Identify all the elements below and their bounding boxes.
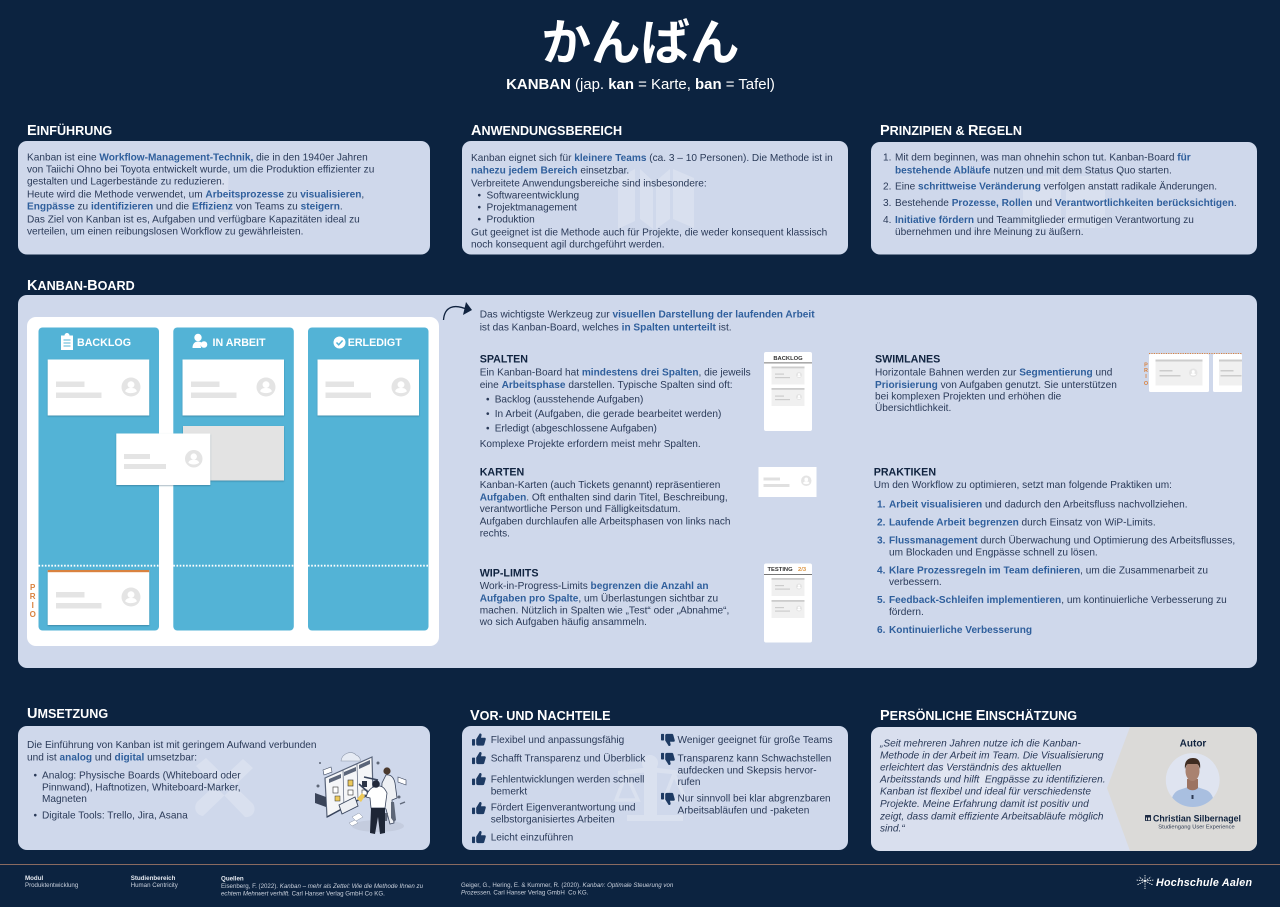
mini swimlane: R (1144, 368, 1148, 374)
quote text: Methode in der Arbeit im Team. Die Visualisierung (880, 750, 1104, 761)
arrow (444, 302, 472, 320)
section: WIP-Limits: wo sich Aufgaben häufig ansammeln. (479, 617, 647, 628)
section: Praktiken: um Blockaden und Engpässe schnell zu lösen. (889, 548, 1098, 559)
section: Swimlanes: Horizontale Bahnen werden zur Segmentierung und (875, 368, 1112, 379)
list: disadvantages: Weniger geeignet für große Teams (678, 735, 833, 746)
section: Spalten (480, 354, 751, 450)
subtitle: KANBAN (jap. kan = Karte, ban = Tafel) (506, 76, 775, 93)
text: Umsetzung: und ist analog und digital umsetzbar: (27, 752, 197, 763)
footer: Quellen: echtem Mehrwert verhilft. Carl Hanser Verlag GmbH Co KG. (221, 890, 385, 898)
list: advantages: Leicht einzuführen (491, 833, 573, 844)
swimlane divider (38, 565, 428, 567)
label: PRIO: O (30, 610, 36, 619)
section: Karten: KARTEN (480, 466, 524, 478)
icon: user with clock (192, 334, 207, 348)
heading: Einführung: EINFÜHRUNG (27, 123, 112, 139)
label: PRIO: R (30, 592, 36, 601)
text: Anwendungsbereich: Verbreitete Anwendungsbereiche sind insbesondere: (471, 178, 707, 189)
text: Einführung: verteilen, um einen reibungslosen Workflow zu gewährleisten. (27, 226, 303, 237)
text: Anwendungsbereich: noch konsequent agil durchgeführt werden. (471, 240, 665, 251)
card (318, 360, 419, 416)
text: Anwendungsbereich: • (478, 203, 482, 214)
text: Anwendungsbereich: Projektmanagement (486, 203, 577, 214)
text: Prinzipien: 3. (883, 198, 891, 209)
section: Spalten: • (486, 409, 490, 420)
text: Prinzipien: bestehende Abläufe nutzen und mit dem Status Quo starten. (895, 165, 1172, 176)
section: WIP-Limits: machen. Nützlich in Spalten wie „Test“ oder „Abnahme“, (480, 606, 729, 617)
author: Christian Silbernagel (1153, 814, 1241, 824)
list: disadvantages: Arbeitsabläufen und -paketen (678, 806, 809, 817)
title: かんばん (542, 16, 740, 71)
section: Praktiken (874, 466, 1235, 636)
list: advantages: Fördert Eigenverantwortung und (491, 803, 635, 814)
section: Praktiken: Feedback-Schleifen implementieren, um kontinuierliche Verbesserung zu (889, 595, 1227, 606)
watermark: exclamation mark (218, 172, 229, 223)
label: PRIO (30, 583, 36, 619)
list: advantages: selbstorganisiertes Arbeiten (491, 815, 615, 826)
text: Einführung (27, 152, 374, 237)
section: Praktiken: PRAKTIKEN (874, 466, 936, 478)
quote text: Kanban ist flexibel und ideal für verschiedenste (880, 787, 1091, 798)
mini column: Backlog: BACKLOG (773, 356, 803, 362)
text: Einführung: Kanban ist eine Workflow-Management-Technik, die in den 1940er Jahren (27, 152, 368, 163)
text: intro to board (480, 310, 815, 333)
mini column: Testing (764, 564, 812, 642)
section: Spalten: Komplexe Projekte erfordern meist mehr Spalten. (480, 439, 701, 450)
section: WIP-Limits: WIP-LIMITS (480, 568, 538, 580)
quote text: Arbeitsstands und hilft Engpässe zu identifizieren. (879, 775, 1106, 786)
section: Praktiken: 4. (877, 566, 886, 577)
text: Anwendungsbereich: Gut geeignet ist die Methode auch für Projekte, die weder konsequent klassisch (471, 228, 827, 239)
text: Prinzipien: 4. (883, 215, 891, 226)
text: Umsetzung: Magneten (42, 794, 87, 805)
text: Anwendungsbereich: nahezu jedem Bereich einsetzbar. (471, 165, 629, 176)
mini swimlane (1144, 354, 1242, 392)
watermark: scales (616, 755, 686, 821)
section: Swimlanes: SWIMLANES (875, 354, 940, 366)
text: Umsetzung: Analog: Physische Boards (Whiteboard oder (42, 771, 241, 782)
section: WIP-Limits: Aufgaben pro Spalte, um Überlastungen sichtbar zu (480, 593, 718, 605)
text: Einführung: gestalten und Lagerbestände zu reduzieren. (27, 176, 225, 187)
footer: Quellen (221, 876, 424, 898)
panel: Umsetzung (18, 726, 430, 850)
section: Praktiken: fördern. (889, 607, 924, 618)
section: Spalten: Erledigt (abgeschlossene Aufgaben) (495, 423, 657, 434)
priority card (48, 570, 149, 625)
card (48, 360, 149, 416)
section: WIP-Limits (479, 568, 729, 628)
mini swimlane: I (1145, 374, 1147, 380)
section: Karten: Aufgaben. Oft enthalten sind darin Titel, Beschreibung, (480, 492, 728, 503)
column: Erledigt (308, 328, 428, 630)
section: Swimlanes: bei komplexen Projekten und erhöhen die (875, 392, 1062, 403)
text: Prinzipien: 1. (883, 153, 891, 164)
footer: Quellen 2 (461, 882, 674, 896)
heading: Kanban-Board: KANBAN-BOARD (27, 278, 135, 294)
section: Spalten: • (486, 423, 490, 434)
list: disadvantages: rufen (678, 777, 701, 788)
heading: Prinzipien und Regeln: PRINZIPIEN & REGELN (880, 123, 1022, 139)
section: Praktiken: 2. (877, 518, 886, 529)
text: Prinzipien: Bestehende Prozesse, Rollen und Verantwortlichkeiten berücksichtigen. (895, 198, 1237, 209)
section: Praktiken: Kontinuierliche Verbesserung (889, 625, 1032, 636)
section: Karten: Kanban-Karten (auch Tickets genannt) repräsentieren (480, 480, 720, 491)
icon: check circle (334, 336, 346, 348)
mini column: Testing: TESTING (768, 567, 793, 573)
text: Einführung: Engpässe zu identifizieren und die Effizienz von Teams zu steigern. (27, 202, 343, 213)
mini column: Testing: 2/3 (798, 567, 807, 573)
footer: Modul: Produktentwicklung (25, 882, 79, 889)
author: Autor (1180, 738, 1206, 750)
dragged card (116, 434, 210, 485)
list: disadvantages: aufdecken und Skepsis hervor- (678, 766, 817, 777)
text: Umsetzung (27, 740, 317, 822)
author: Studiengang User Experience (1158, 824, 1235, 830)
small items (316, 762, 400, 798)
footer: Modul (25, 875, 79, 889)
panel: Anwendungsbereich (462, 141, 848, 254)
quote text: sind.“ (880, 824, 905, 835)
mini swimlane: O (1144, 381, 1149, 387)
logo: Hochschule Aalen: Hochschule Aalen (1156, 877, 1252, 889)
text: Umsetzung: • (34, 771, 38, 782)
footer: Studienbereich: Studienbereich (131, 875, 176, 882)
list: advantages: Schafft Transparenz und Überblick (491, 753, 646, 765)
list: disadvantages: Transparenz kann Schwachstellen (678, 754, 831, 765)
list: disadvantages (661, 734, 833, 817)
section: Praktiken: Flussmanagement durch Überwachung und Optimierung des Arbeitsflusses, (889, 535, 1235, 547)
text: Anwendungsbereich: Kanban eignet sich für kleinere Teams (ca. 3 – 10 Personen). Die Methode ist in (471, 153, 833, 164)
section: Karten: verantwortliche Person und Fälligkeitsdatum. (480, 504, 681, 515)
section: Swimlanes: Übersichtlichkeit. (875, 402, 951, 414)
quote text (879, 738, 1106, 835)
footer divider (0, 864, 1280, 865)
icon: thumbs up (472, 733, 486, 746)
quote text: erleichtert das Verständnis des aktuellen (880, 763, 1062, 774)
mini column: Backlog (764, 352, 812, 431)
label: PRIO: I (32, 601, 34, 610)
watermark: columns (1023, 176, 1105, 228)
list: advantages: bemerkt (491, 787, 527, 798)
text: Prinzipien: 2. (883, 182, 891, 193)
text: Prinzipien: Mit dem beginnen, was man ohnehin schon tut. Kanban-Board für (895, 153, 1191, 164)
text: intro to board: ist das Kanban-Board, welches in Spalten unterteilt ist. (480, 322, 732, 333)
section: Spalten: Backlog (ausstehende Aufgaben) (495, 395, 643, 406)
card (182, 360, 284, 416)
section: Karten (480, 466, 731, 540)
illustration: team at kanban board (315, 753, 406, 834)
icon: clipboard (61, 333, 73, 350)
text: Umsetzung: Digitale Tools: Trello, Jira, Asana (42, 811, 188, 822)
text: Prinzipien: Eine schrittweise Veränderung verfolgen anstatt radikale Änderungen. (895, 181, 1217, 193)
footer: Modul: Modul (25, 875, 43, 882)
section: Praktiken: 5. (877, 595, 886, 606)
text: intro to board: Das wichtigste Werkzeug zur visuellen Darstellung der laufenden Arbeit (480, 310, 815, 321)
text: Anwendungsbereich: • (478, 191, 482, 202)
section: Spalten: Ein Kanban-Board hat mindestens drei Spalten, die jeweils (480, 368, 751, 379)
panel: Prinzipien und Regeln (871, 142, 1257, 254)
quote text: „Seit mehreren Jahren nutze ich die Kanban- (879, 738, 1082, 749)
section: Spalten: • (486, 395, 490, 406)
footer: Quellen: Eisenberg, F. (2022). Kanban – mehr als Zettel: Wie die Methode Ihnen zu (221, 883, 424, 890)
footer: Studienbereich (131, 875, 179, 889)
text: Prinzipien: Initiative fördern und Teammitglieder ermutigen Verantwortung zu (895, 215, 1194, 226)
person front (366, 786, 387, 808)
footer: Studienbereich: Human Centricity (131, 882, 179, 889)
icon: LinkedIn (1145, 815, 1151, 821)
text: Anwendungsbereich: Softwareentwicklung (486, 191, 579, 202)
section: Praktiken: 6. (877, 625, 886, 636)
section: Praktiken: 1. (877, 499, 886, 510)
column: Backlog (38, 328, 159, 630)
text: Umsetzung: • (34, 811, 38, 822)
heading: Vor- und Nachteile: VOR- UND NACHTEILE (470, 708, 610, 724)
heading: Anwendungsbereich: ANWENDUNGSBEREICH (471, 123, 622, 139)
text: Anwendungsbereich: • (478, 215, 482, 226)
footer: Quellen 2: Prozessen. Carl Hanser Verlag GmbH Co KG. (461, 890, 589, 896)
section: Spalten: In Arbeit (Aufgaben, die gerade bearbeitet werden) (495, 409, 721, 420)
list: advantages: Flexibel und anpassungsfähig (491, 735, 624, 746)
section: Praktiken: Um den Workflow zu optimieren, setzt man folgende Praktiken um: (874, 480, 1172, 491)
section: Swimlanes: Priorisierung von Aufgaben genutzt. Sie unterstützen (875, 380, 1117, 391)
list: disadvantages: Nur sinnvoll bei klar abgrenzbaren (678, 794, 831, 805)
text: Einführung: von Taiichi Ohno bei Toyota entwickelt wurde, um die Produktion effizienter zu (27, 164, 374, 175)
quote text: Projekte. Meine Erfahrung damit ist positiv und (880, 799, 1089, 810)
section: Praktiken: verbessern. (889, 577, 942, 588)
heading: Umsetzung: UMSETZUNG (27, 706, 108, 722)
watermark: tools (195, 758, 255, 817)
section: Swimlanes (875, 354, 1117, 414)
panel: Kanban-Board (18, 295, 1257, 668)
icon: thumbs down (661, 734, 675, 746)
text: Anwendungsbereich: Produktion (486, 215, 535, 226)
column: In Arbeit: IN ARBEIT (212, 337, 266, 349)
section: Karten: Aufgaben durchlaufen alle Arbeitsphasen von links nach (480, 517, 731, 528)
panel: Einführung (18, 141, 430, 254)
text: Prinzipien: übernehmen und ihre Meinung zu äußern. (895, 227, 1084, 238)
author background (1107, 727, 1257, 851)
section: Praktiken: 3. (877, 536, 886, 547)
footer: Quellen: Quellen (221, 876, 244, 882)
list: advantages (472, 733, 646, 844)
footer: Quellen 2: Geiger, G., Hering, E. & Kummer, R. (2020). Kanban: Optimale Steuerung von (461, 882, 674, 889)
mini swimlane: P (1144, 362, 1148, 368)
text: Prinzipien (883, 153, 1237, 238)
column: Backlog: BACKLOG (77, 337, 131, 349)
section: WIP-Limits: Work-in-Progress-Limits begrenzen die Anzahl an (480, 581, 709, 592)
watermark: book (618, 169, 694, 229)
text: Umsetzung: Die Einführung von Kanban ist mit geringem Aufwand verbunden (27, 740, 317, 751)
board illustration (27, 317, 439, 646)
section: Praktiken: Arbeit visualisieren und dadurch den Arbeitsfluss nachvollziehen. (889, 499, 1188, 510)
watermark: quote (938, 756, 1000, 804)
section: Spalten: SPALTEN (480, 354, 528, 366)
text: Einführung: Heute wird die Methode verwendet, um Arbeitsprozesse zu visualisieren, (27, 189, 364, 200)
section: Karten: rechts. (480, 529, 510, 540)
section: Praktiken: Laufende Arbeit begrenzen durch Einsatz von WiP-Limits. (889, 518, 1156, 529)
column: Erledigt: ERLEDIGT (348, 337, 402, 349)
card placeholder (183, 426, 284, 480)
portrait (1166, 753, 1220, 812)
text: Umsetzung: Pinnwand), Haftnotizen, Whiteboard-Marker, (42, 783, 241, 794)
panel: Persönliche Einschätzung (871, 727, 1257, 851)
author (1145, 738, 1241, 830)
section: Praktiken: Klare Prozessregeln im Team definieren, um die Zusammenarbeit zu (889, 566, 1208, 577)
label: PRIO: P (30, 583, 36, 592)
section: Spalten: eine Arbeitsphase darstellen. Typische Spalten sind oft: (480, 380, 733, 391)
text: Anwendungsbereich (471, 153, 833, 251)
list: advantages: Fehlentwicklungen werden schnell (491, 775, 644, 786)
title (506, 16, 775, 93)
column: In Arbeit (173, 328, 294, 630)
quote text: zeigt, dass damit effiziente Arbeitsabläufe möglich (879, 812, 1104, 823)
panel: Vor- und Nachteile (462, 726, 848, 850)
heading: Persönliche Einschätzung: PERSÖNLICHE EINSCHÄTZUNG (880, 708, 1077, 724)
person back (381, 775, 397, 824)
text: Einführung: Das Ziel von Kanban ist es, Aufgaben und verfügbare Kapazitäten ideal zu (27, 214, 360, 225)
mini card (758, 467, 816, 497)
